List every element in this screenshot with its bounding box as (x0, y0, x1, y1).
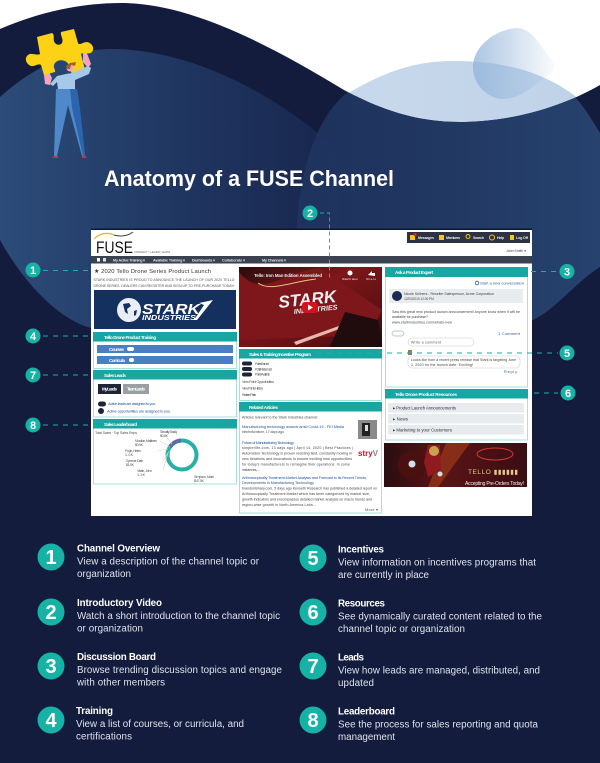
legend item 1: channel overview: organization (77, 569, 131, 580)
panel: discussion board: 1, 2020 for the launch date. Exciting! (411, 363, 473, 367)
legend item 6: resources (300, 598, 543, 635)
legend item 6: resources: channel topic or organization (338, 624, 465, 635)
marker 8 (26, 418, 40, 432)
legend item 1: channel overview (38, 544, 260, 580)
navigation bar: Collaborate ▾ (222, 258, 246, 262)
legend item 3: discussion board: Browse trending discussion topics and engage (77, 665, 283, 676)
legend item 1: channel overview: Channel Overview (77, 544, 160, 554)
legend item 2: introductory video (38, 598, 280, 634)
panel: related articles: growth indicators and encompasses detailed market analysis on macro trends and (242, 498, 372, 502)
illustration: person holding puzzle piece (26, 29, 93, 158)
legend item 5: incentives: View information on incentives programs that (338, 558, 536, 568)
panel: related articles: instances,... (242, 468, 260, 472)
legend item 8: leaderboard (300, 706, 539, 743)
donut chart: 1.3K (137, 473, 146, 477)
panel: related articles: Automation Technology is proven resisting field, constantly moving in (242, 452, 352, 456)
marker 7 (26, 368, 40, 382)
donut chart: 1.0K (125, 453, 134, 457)
panel: introductory video: Tello: Iron Man Edition Assembled (254, 273, 322, 278)
marker 2 (302, 206, 318, 220)
legend item 4: training: 4 (45, 710, 57, 732)
top toolbar: Messages (418, 236, 434, 240)
legend item 3: discussion board: Discussion Board (77, 652, 156, 663)
panel: related articles: brandonbinary.com, 5 days ago Kenneth Research has published a detailed report on (242, 486, 377, 490)
marker 3: 3 (564, 266, 570, 278)
panel: leaderboard (93, 419, 237, 484)
marker 7: 7 (30, 370, 36, 382)
donut chart: Vitale, John (137, 469, 152, 473)
panel: channel overview: DRONE SERIES. DEALERS CAN REGISTER AND SIGN-UP TO PRE-PURCHASE TODAY! (94, 284, 235, 288)
icon: shoes (52, 155, 87, 158)
panel: related articles: Articles relevant to the Stark Industries channel: (242, 416, 318, 420)
marker 2: 2 (307, 208, 313, 220)
legend item 7: leads: Leads (338, 652, 365, 664)
callout markers on screenshot (26, 206, 576, 432)
icon: trousers (54, 89, 85, 156)
logo: FUSE: CONNECT | LEARN | EARN (134, 250, 170, 254)
legend item 7: leads: 7 (307, 656, 319, 678)
panel: discussion board: Start a new conversation (480, 280, 524, 286)
legend item 4: training: View a list of courses, or curricula, and (76, 719, 244, 730)
callout connector lines (43, 213, 558, 425)
icon: arms (43, 48, 91, 85)
panel: incentive program: View Point Opportunities (242, 380, 274, 384)
marker 6: 6 (565, 388, 571, 400)
panel: discussion board: www.starkindustries.com/whats-new (392, 320, 452, 324)
panel: training: Curricula (109, 358, 125, 363)
panel: channel overview (94, 268, 236, 329)
panel: discussion board: 12/03/2019 12:26 PM (404, 297, 434, 301)
panel: related articles: simplerlife.com, 13 days ago | April 14, 2020 | Best Practices | (242, 446, 353, 450)
panel: incentive program: Points Redeemed (255, 368, 272, 372)
legend item 6: resources: See dynamically curated content related to the (338, 612, 543, 622)
donut chart: $1.0K (126, 463, 135, 467)
marker 1 (26, 262, 40, 278)
donut chart: Spencer, Dale (126, 459, 143, 463)
panel: leads: Sales Leads (104, 373, 126, 378)
panel: incentive program: Redeem Points (242, 393, 256, 397)
panel: related articles: More ▾ (365, 507, 378, 512)
panel: incentive program: Sales & Training Incentive Program (249, 352, 311, 357)
panel: discussion board: Nicole Sellners - Reseller Salesperson, Acme Corporation (404, 292, 494, 296)
panel: discussion board: 1 Comment (498, 331, 521, 336)
panel: incentive program: View Points History (242, 386, 263, 390)
donut chart: $47.5K (194, 479, 205, 483)
stark industries banner (94, 290, 236, 329)
panel: introductory video: STARK (277, 287, 339, 312)
legend item 1: channel overview: View a description of the channel topic or (77, 556, 260, 568)
icon: yellow puzzle piece (26, 29, 93, 75)
panel: channel overview: ★ 2020 Tello Drone Series Product Launch (94, 268, 211, 275)
marker 3 (560, 264, 574, 279)
panel: leads: Team Leads (127, 386, 145, 392)
panel: leads (93, 370, 237, 417)
legend item 6: resources: Resources (338, 598, 386, 610)
panel: discussion board: Write a comment (411, 340, 441, 344)
legend item 8: leaderboard: See the process for sales reporting and quota (338, 720, 539, 730)
donut chart: $0.8K (160, 434, 169, 438)
panel: introductory video (239, 267, 382, 347)
panel: related articles: for today's manufacturers to reimagine their operations. In some (242, 462, 350, 466)
screenshot panel (91, 228, 532, 516)
thumbnail: stryv logo: stryV (358, 449, 379, 458)
legend item 3: discussion board: with other members (76, 678, 165, 688)
panel: related articles: Arthroscopically Treatment Market which has been categorized by market size, (242, 492, 370, 496)
panel: leads: Active leads are assigned to you. (108, 401, 156, 406)
panel: related articles: Future of Manufacturing Technology (242, 440, 294, 445)
legend item 8: leaderboard: 8 (307, 710, 319, 732)
user name: John Smith ▾ (506, 249, 526, 253)
navigation bar (91, 256, 532, 264)
marker 8: 8 (30, 420, 36, 432)
legend item 2: introductory video: Introductory Video (77, 598, 162, 609)
panel: discussion board: available for purchase? (392, 315, 428, 319)
panel: product resources: ▸ Marketing to your Customers (393, 428, 453, 432)
thumbnail: article photo (358, 420, 377, 439)
panel: product resources: ▸ Product Launch Announcements (393, 406, 457, 410)
top toolbar (407, 232, 530, 243)
legend item 1: channel overview: 1 (45, 547, 57, 569)
panel: discussion board: Reply (504, 369, 517, 374)
marker 5 (560, 346, 574, 360)
donut chart: Moulton, Matthew (135, 439, 157, 443)
logo: FUSE: FUSE (96, 239, 133, 257)
panel: training (93, 332, 237, 368)
legend item 3: discussion board: 3 (45, 656, 57, 678)
panel: product resources (385, 389, 528, 440)
panel: leads: My Leads (102, 386, 117, 392)
legend item 5: incentives: 5 (307, 548, 319, 570)
legend item 4: training: Training (76, 706, 113, 717)
donut chart: $0.9K (135, 443, 144, 447)
panel: discussion board: Looks like from a recent press release that Stark is targeting June (411, 358, 516, 362)
stark industries banner: STARK (142, 301, 201, 318)
logo: FUSE (94, 232, 170, 257)
top toolbar: Log Off (516, 236, 529, 240)
panel: incentive program: Points Available (255, 372, 270, 376)
legend item 3: discussion board (38, 652, 283, 688)
marker 4 (26, 328, 40, 344)
legend item 5: incentives: Incentives (338, 544, 385, 556)
panel: training: Courses (109, 347, 124, 352)
donut chart: Simpson, Mark (194, 475, 214, 479)
panel: introductory video: Watch later (342, 277, 358, 281)
panel: channel overview: STARK INDUSTRIES IS PROUD TO ANNOUNCE THE LAUNCH OF OUR 2020 TELLO (94, 278, 235, 282)
navigation bar: Available Training ▾ (153, 258, 186, 262)
legend item 2: introductory video: 2 (45, 602, 57, 624)
donut chart (125, 430, 214, 483)
legend item 7: leads: updated (338, 678, 374, 689)
panel: related articles: Developments in Manufacturing Technology (242, 480, 314, 485)
panel: incentive program (239, 349, 382, 400)
legend item 6: resources: 6 (307, 602, 319, 624)
legend item 2: introductory video: Watch a short introduction to the channel topic (77, 611, 280, 622)
panel: incentive program: Points Earned (255, 362, 269, 366)
panel: related articles: electrofurniture, 17 days ago (242, 430, 284, 434)
background: left blue hump (0, 49, 318, 328)
panel: introductory video: INDUSTRIES (293, 304, 338, 316)
panel: product resources: ▸ News (393, 416, 409, 422)
legend item 4: training (38, 706, 244, 742)
panel: introductory video: Share (366, 277, 376, 281)
top toolbar: Members (446, 236, 460, 240)
panel: related articles: Arthroscopically Treatment Market Analysis and Forecast to Its Recent Trends, (242, 475, 367, 480)
panel: leaderboard: Sales Leaderboard (104, 422, 137, 427)
icon: play button (302, 302, 318, 313)
promo banner: tello drone: Accepting Pre-Orders Today! (465, 481, 524, 487)
title: Anatomy of a FUSE Channel (104, 166, 394, 191)
legend item 5: incentives (300, 544, 536, 581)
panel: related articles: Related Articles (249, 405, 278, 410)
legend item 8: leaderboard: management (338, 732, 395, 743)
icon: torso (50, 66, 91, 89)
panel: discussion board: Ask a Product Expert (395, 270, 433, 275)
panel: related articles: Manufacturing technology awards amid Covid-19 - FEI Media (242, 424, 345, 429)
marker 1: 1 (30, 265, 36, 277)
navigation bar: Dashboards ▾ (192, 258, 216, 262)
panel: product resources: Tello Drone Product Resources (395, 392, 457, 397)
panel: discussion board: Saw this great new product launch announcement! Anyone know when it will be (392, 310, 520, 314)
panel: training: Tello Drone Product Training (104, 335, 156, 340)
legend item 8: leaderboard: Leaderboard (338, 706, 395, 718)
stark industries banner: INDUSTRIES (142, 313, 196, 322)
background: right blue hump (296, 92, 600, 320)
panel: related articles (239, 402, 382, 513)
icon: head (66, 64, 74, 72)
promo banner: tello drone: TELLO ▮▮▮▮▮▮ (468, 469, 518, 476)
promo banner: tello drone (384, 443, 527, 487)
legend item 4: training: certifications (76, 732, 132, 742)
navigation bar: My Channels ▾ (262, 258, 287, 262)
marker 4: 4 (30, 331, 37, 343)
panel: discussion board (385, 267, 528, 387)
top toolbar: Search (473, 236, 485, 240)
panel: leaderboard: Total Sales · Top Sales Reps (95, 431, 137, 435)
legend item 7: leads: View how leads are managed, distributed, and (338, 666, 540, 676)
top toolbar: Help (497, 236, 505, 240)
panel: related articles: new iterations and innovations to ensure exciting new opportunities (242, 457, 352, 461)
marker 5: 5 (564, 348, 570, 360)
legend item 2: introductory video: or organization (77, 624, 143, 634)
marker 6 (560, 386, 576, 400)
panel: leads: Active opportunities are assigned to you. (107, 408, 171, 414)
donut chart: Security, Sadiq (160, 430, 177, 434)
legend item 7: leads (300, 652, 540, 689)
legend item 5: incentives: are currently in place (338, 570, 430, 581)
navigation bar: My Active Training ▾ (113, 258, 146, 262)
donut chart: Pugh, Helen (125, 449, 141, 453)
panel: related articles: region-wise growth in North America Latin... (242, 503, 316, 507)
